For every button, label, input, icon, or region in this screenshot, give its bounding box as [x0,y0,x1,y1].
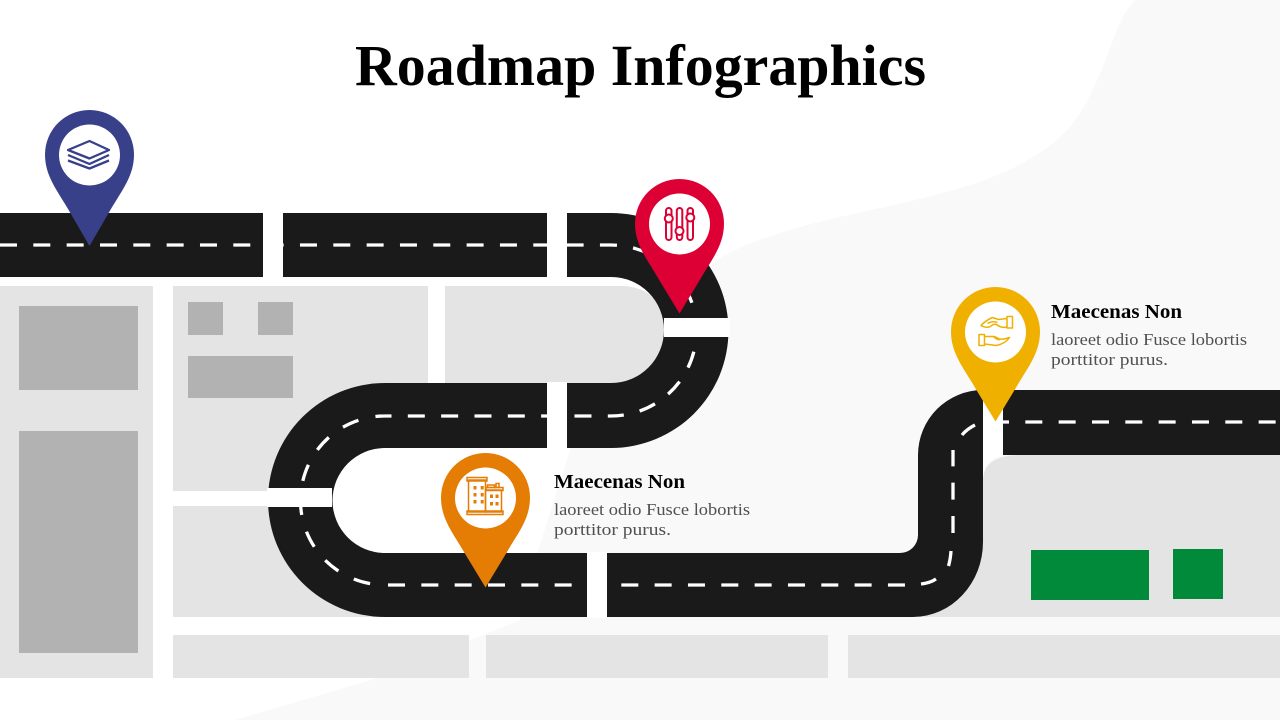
pin: yellow [951,287,1040,422]
city ground blocks [0,286,1280,678]
grey buildings [19,302,293,653]
callout body: laoreet odio Fusce lobortis [554,500,750,519]
callout heading: Maecenas Non [554,472,685,493]
icon: buildings [467,478,503,514]
pin: orange [441,453,530,588]
road crossings [173,212,1003,618]
pin: red [635,179,724,314]
title: Roadmap Infographics [355,33,926,98]
callout body: porttitor purus. [554,520,671,539]
icon: sliders [665,208,694,240]
icon: hands [979,316,1012,346]
callout: yellow stop [1051,302,1247,369]
callout body [1051,330,1247,369]
pin: blue [45,110,134,246]
winding road [0,213,1280,617]
callout body: porttitor purus. [1051,350,1168,369]
callout heading: Maecenas Non [1051,302,1182,323]
callout: orange stop [554,472,750,539]
green parks [1031,549,1223,600]
road centre dashes [0,245,1280,585]
callout body [554,500,750,539]
icon: layers [68,141,109,168]
white inner bend of road [332,447,571,554]
callout body: laoreet odio Fusce lobortis [1051,330,1247,349]
